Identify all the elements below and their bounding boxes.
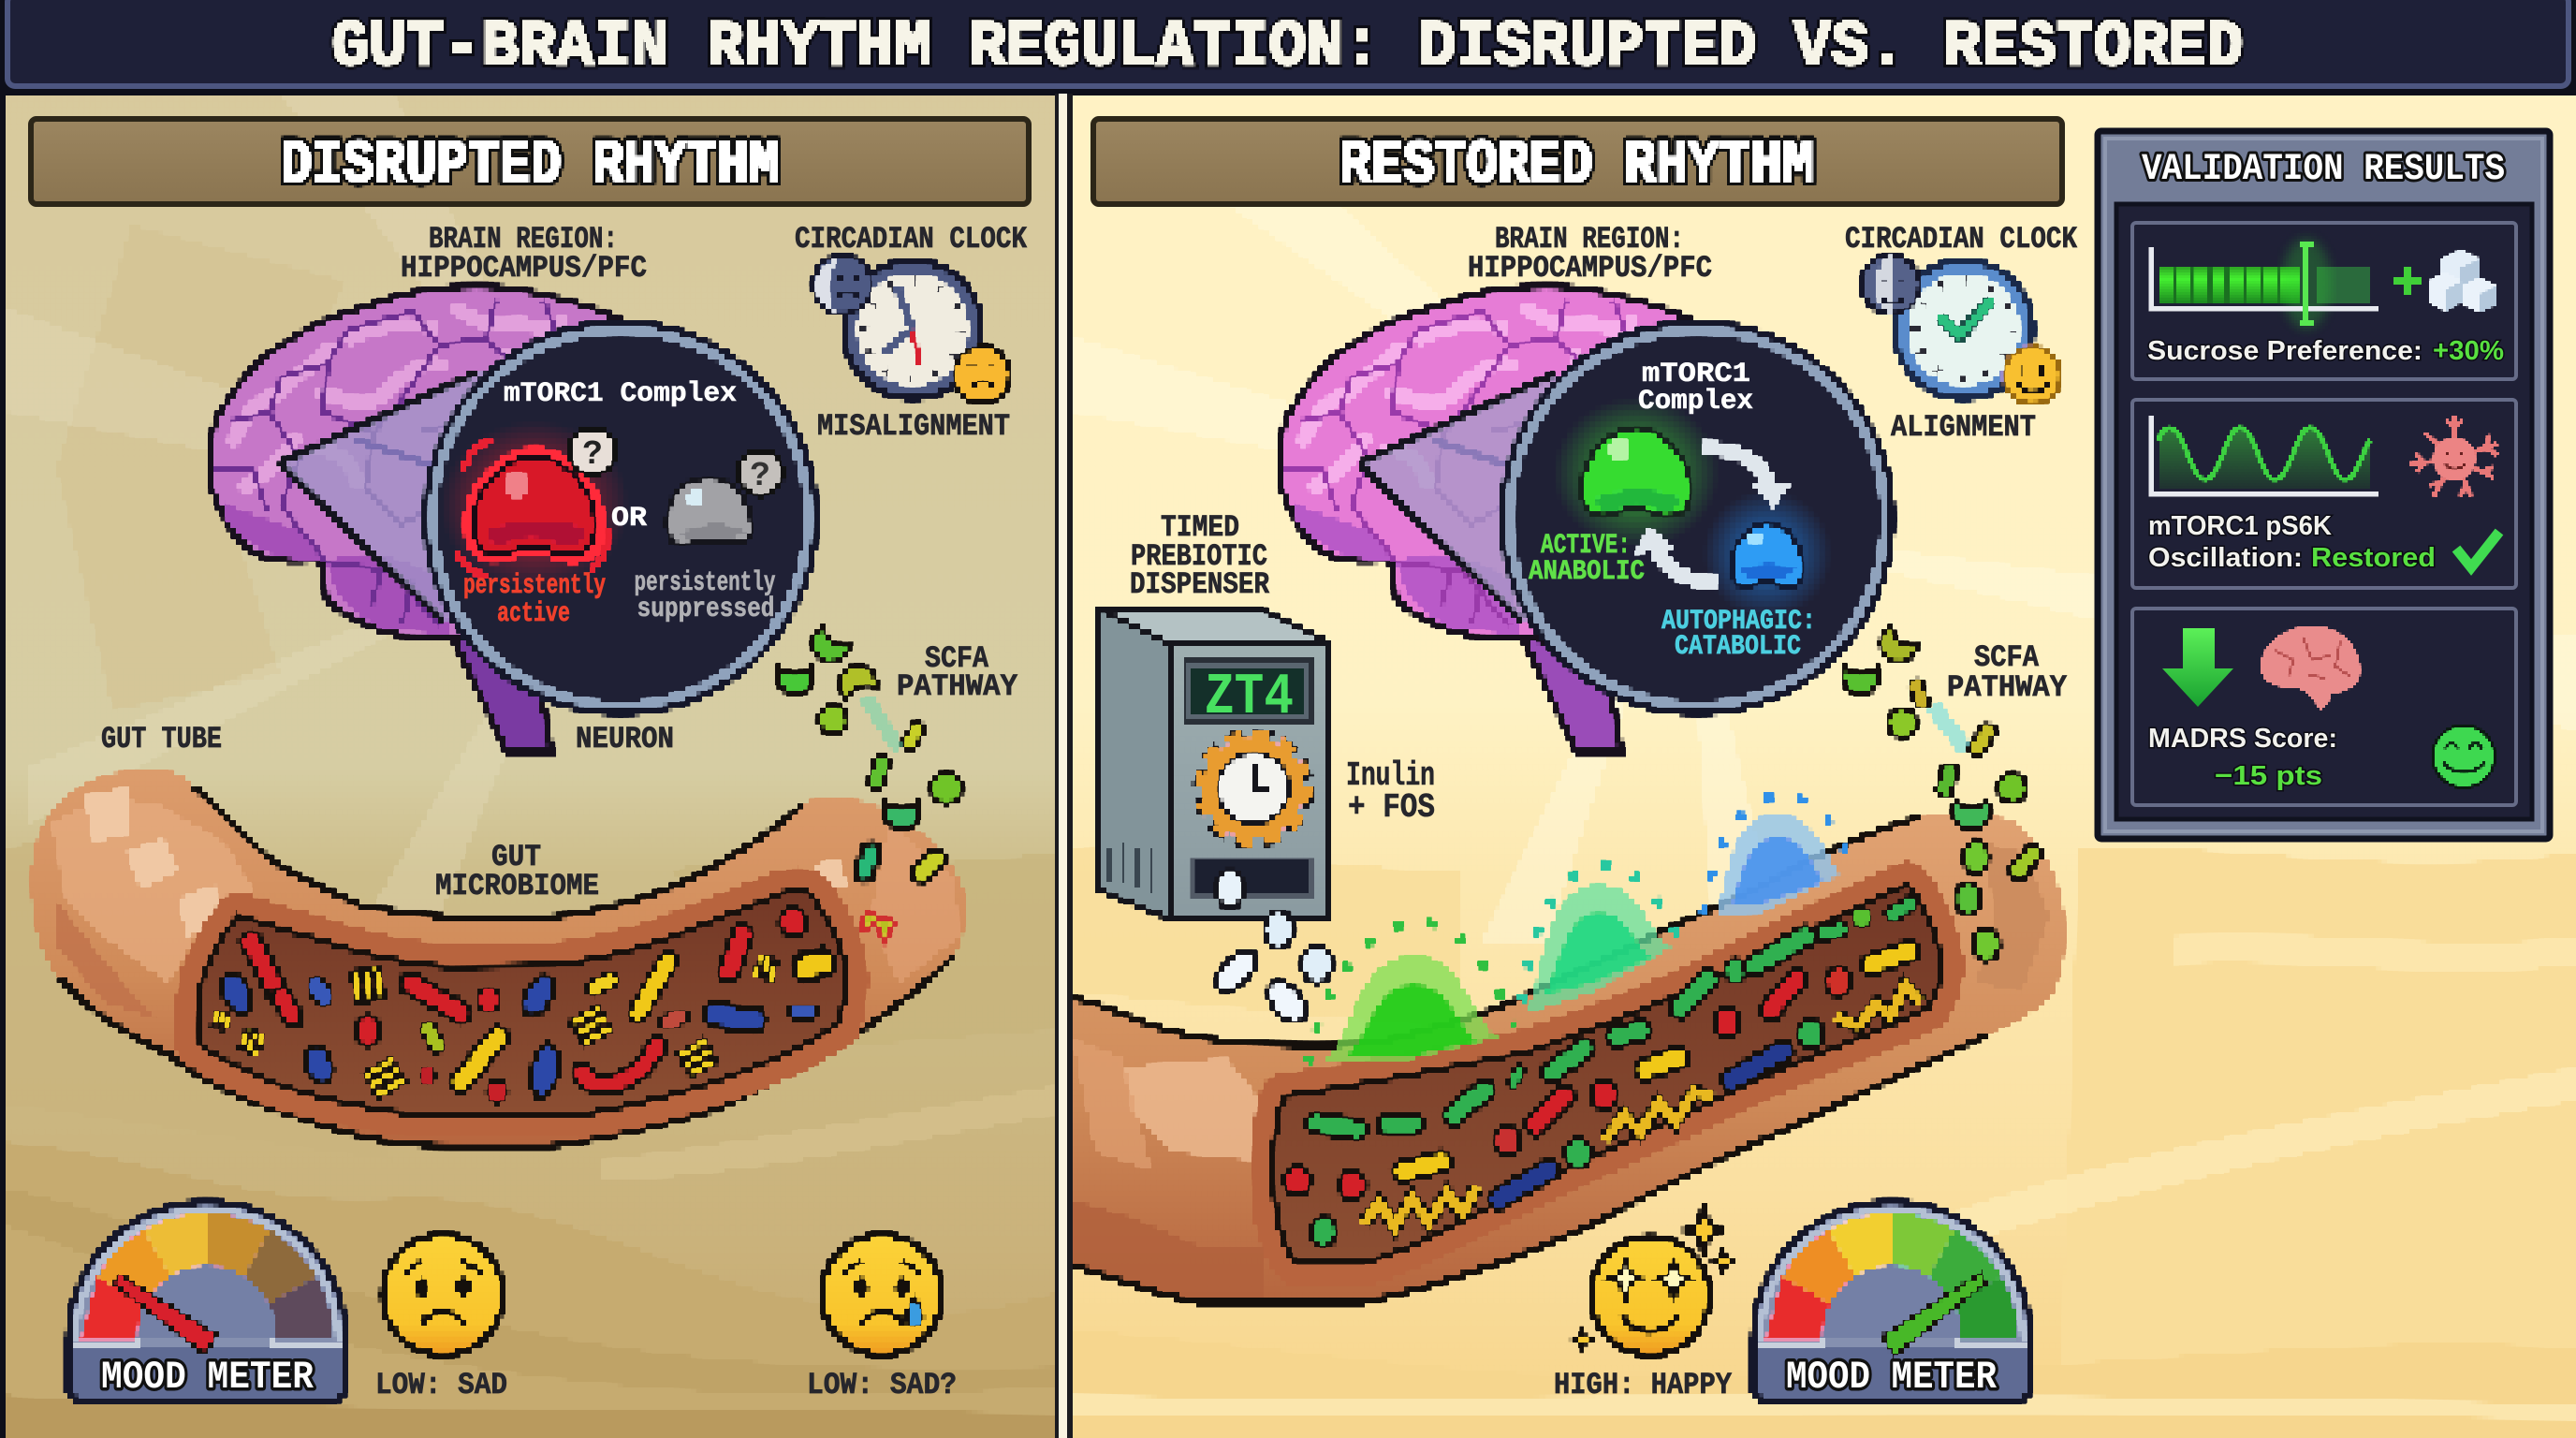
header banner: restored <box>1093 119 2062 204</box>
magnifier title: mTORC1 <box>1642 359 1750 390</box>
label: timed prebiotic dispenser: TIMED <box>1161 510 1239 545</box>
gauge label: MOOD METER <box>1786 1355 1998 1400</box>
icon: sad face <box>383 1235 503 1355</box>
panel: restored rhythm <box>1067 94 2576 1438</box>
value: +30%: +30% <box>2433 336 2504 366</box>
icon: gut tube with organised microbiome <box>1067 814 2065 1302</box>
magnifier: mTORC1 cycle zoom <box>1359 319 1895 716</box>
title bar <box>7 0 2569 86</box>
icon: SCFA pathway particles <box>1843 626 2044 961</box>
card: sucrose preference <box>2132 223 2516 379</box>
label: mTORC1 pS6K oscillation: Oscillation: <box>2148 543 2303 573</box>
label: SCFA pathway: SCFA <box>1974 640 2040 675</box>
label: misalignment: MISALIGNMENT <box>817 409 1010 444</box>
wave: blue <box>1704 796 1849 916</box>
label: MADRS score: MADRS Score: <box>2148 724 2337 754</box>
icon: aligned circadian clock <box>1862 256 2060 404</box>
icon: persistently suppressed gray blob <box>667 450 783 545</box>
label: circadian clock: CIRCADIAN CLOCK <box>795 222 1028 257</box>
chart: pS6K oscillation wave <box>2152 416 2379 493</box>
label: persistently active: persistently <box>463 570 606 602</box>
display: ZT4: ZT4 <box>1205 664 1294 730</box>
icon: happy face with star eyes <box>1574 1206 1733 1355</box>
magnifier: mTORC1 complex zoom <box>279 319 819 716</box>
panel divider <box>1055 94 1073 1438</box>
magnifier title: mTORC1 Complex <box>504 378 737 410</box>
bar chart: sucrose preference <box>2152 239 2379 329</box>
value: minus 15 pts: −15 pts <box>2215 761 2322 791</box>
arrow: autophagic to active <box>1634 527 1717 583</box>
panel title: VALIDATION RESULTS <box>2142 149 2505 191</box>
label: brain region: BRAIN REGION: <box>1495 222 1684 257</box>
icon: brain with neuron stem <box>1280 286 1744 752</box>
label: active anabolic: ACTIVE: <box>1541 530 1631 562</box>
label: SCFA pathway: SCFA <box>925 641 989 676</box>
label: gut microbiome: GUT <box>491 840 541 874</box>
label: sucrose preference: Sucrose Preference: <box>2147 336 2422 366</box>
icon: SCFA pathway particles <box>777 626 961 941</box>
header banner: disrupted <box>31 119 1029 204</box>
panel: validation results <box>2098 131 2550 839</box>
question mark: ? <box>582 435 603 474</box>
icon: brain with neuron stem <box>210 286 674 752</box>
label: timed prebiotic dispenser: DISPENSER <box>1130 567 1270 602</box>
label: active anabolic: ANABOLIC <box>1529 556 1645 588</box>
label: alignment: ALIGNMENT <box>1891 410 2036 445</box>
label: SCFA pathway: PATHWAY <box>1947 670 2068 705</box>
icon: neuron <box>2410 417 2497 496</box>
label: persistently active: active <box>497 598 570 630</box>
question mark: ? <box>750 457 770 495</box>
label: low sad question: LOW: SAD? <box>807 1368 957 1402</box>
magnifier title: Complex <box>1638 386 1753 418</box>
icon: down arrow <box>2162 628 2233 707</box>
label: autophagic catabolic: AUTOPHAGIC: <box>1661 606 1816 638</box>
wave: green <box>1307 922 1515 1064</box>
card: MADRS score <box>2132 609 2516 805</box>
icon: plus <box>2393 267 2422 295</box>
icon: green smile <box>2433 726 2495 787</box>
icon: gut tube cross-section with microbiome <box>31 770 966 1146</box>
value: restored: Restored <box>2311 543 2436 573</box>
mood meter: low <box>68 1202 345 1402</box>
icon: active green blob <box>1554 398 1719 548</box>
card: mTORC1 oscillation <box>2132 400 2516 588</box>
label: brain region: HIPPOCAMPUS/PFC <box>401 251 647 286</box>
label: high happy: HIGH: HAPPY <box>1554 1368 1733 1402</box>
label: low sad: LOW: SAD <box>375 1368 507 1402</box>
label: gut tube: GUT TUBE <box>101 722 222 756</box>
label: brain region: BRAIN REGION: <box>429 222 618 257</box>
label: timed prebiotic dispenser: PREBIOTIC <box>1131 539 1267 574</box>
icon: prebiotic pills <box>1210 871 1332 1029</box>
wave: teal <box>1521 866 1680 1013</box>
arrow: active to autophagic <box>1704 448 1792 508</box>
icon: brain <box>2261 625 2361 710</box>
label: mTORC1 pS6K oscillation: mTORC1 pS6K <box>2148 511 2332 541</box>
icon: autophagic blue blob <box>1704 491 1831 618</box>
icon: check mark <box>2456 532 2499 567</box>
gauge label: MOOD METER <box>101 1355 315 1400</box>
label: circadian clock: CIRCADIAN CLOCK <box>1845 222 2078 257</box>
label: inulin + FOS: + FOS <box>1348 788 1435 827</box>
label: persistently suppressed: persistently <box>635 567 775 599</box>
label: gut microbiome: MICROBIOME <box>435 869 599 903</box>
chart: rhythmic oscillation waves <box>1307 796 1849 1064</box>
label: inulin + FOS: Inulin <box>1346 756 1435 795</box>
label: brain region: HIPPOCAMPUS/PFC <box>1468 251 1712 286</box>
icon: sad face with tear <box>822 1235 942 1355</box>
icon: persistently active red blob <box>441 421 628 590</box>
main title: GUT-BRAIN RHYTHM REGULATION: DISRUPTED VS. RESTORED <box>331 11 2244 85</box>
OR label: OR <box>611 503 647 535</box>
banner title: RESTORED RHYTHM <box>1339 130 1814 200</box>
icon: prebiotic dispenser <box>1099 609 1330 918</box>
mood meter: high <box>1753 1202 2030 1402</box>
icon: misaligned circadian clock <box>813 256 1010 403</box>
background: muted desert <box>7 94 1055 1438</box>
label: SCFA pathway: PATHWAY <box>897 669 1018 704</box>
background: bright desert <box>1073 94 2576 1438</box>
label: autophagic catabolic: CATABOLIC <box>1675 631 1801 663</box>
label: persistently suppressed: suppressed <box>637 594 775 625</box>
banner title: DISRUPTED RHYTHM <box>281 130 780 200</box>
panel: disrupted rhythm <box>7 94 1055 1438</box>
icon: sugar cubes <box>2428 249 2496 313</box>
label: neuron: NEURON <box>576 722 674 756</box>
